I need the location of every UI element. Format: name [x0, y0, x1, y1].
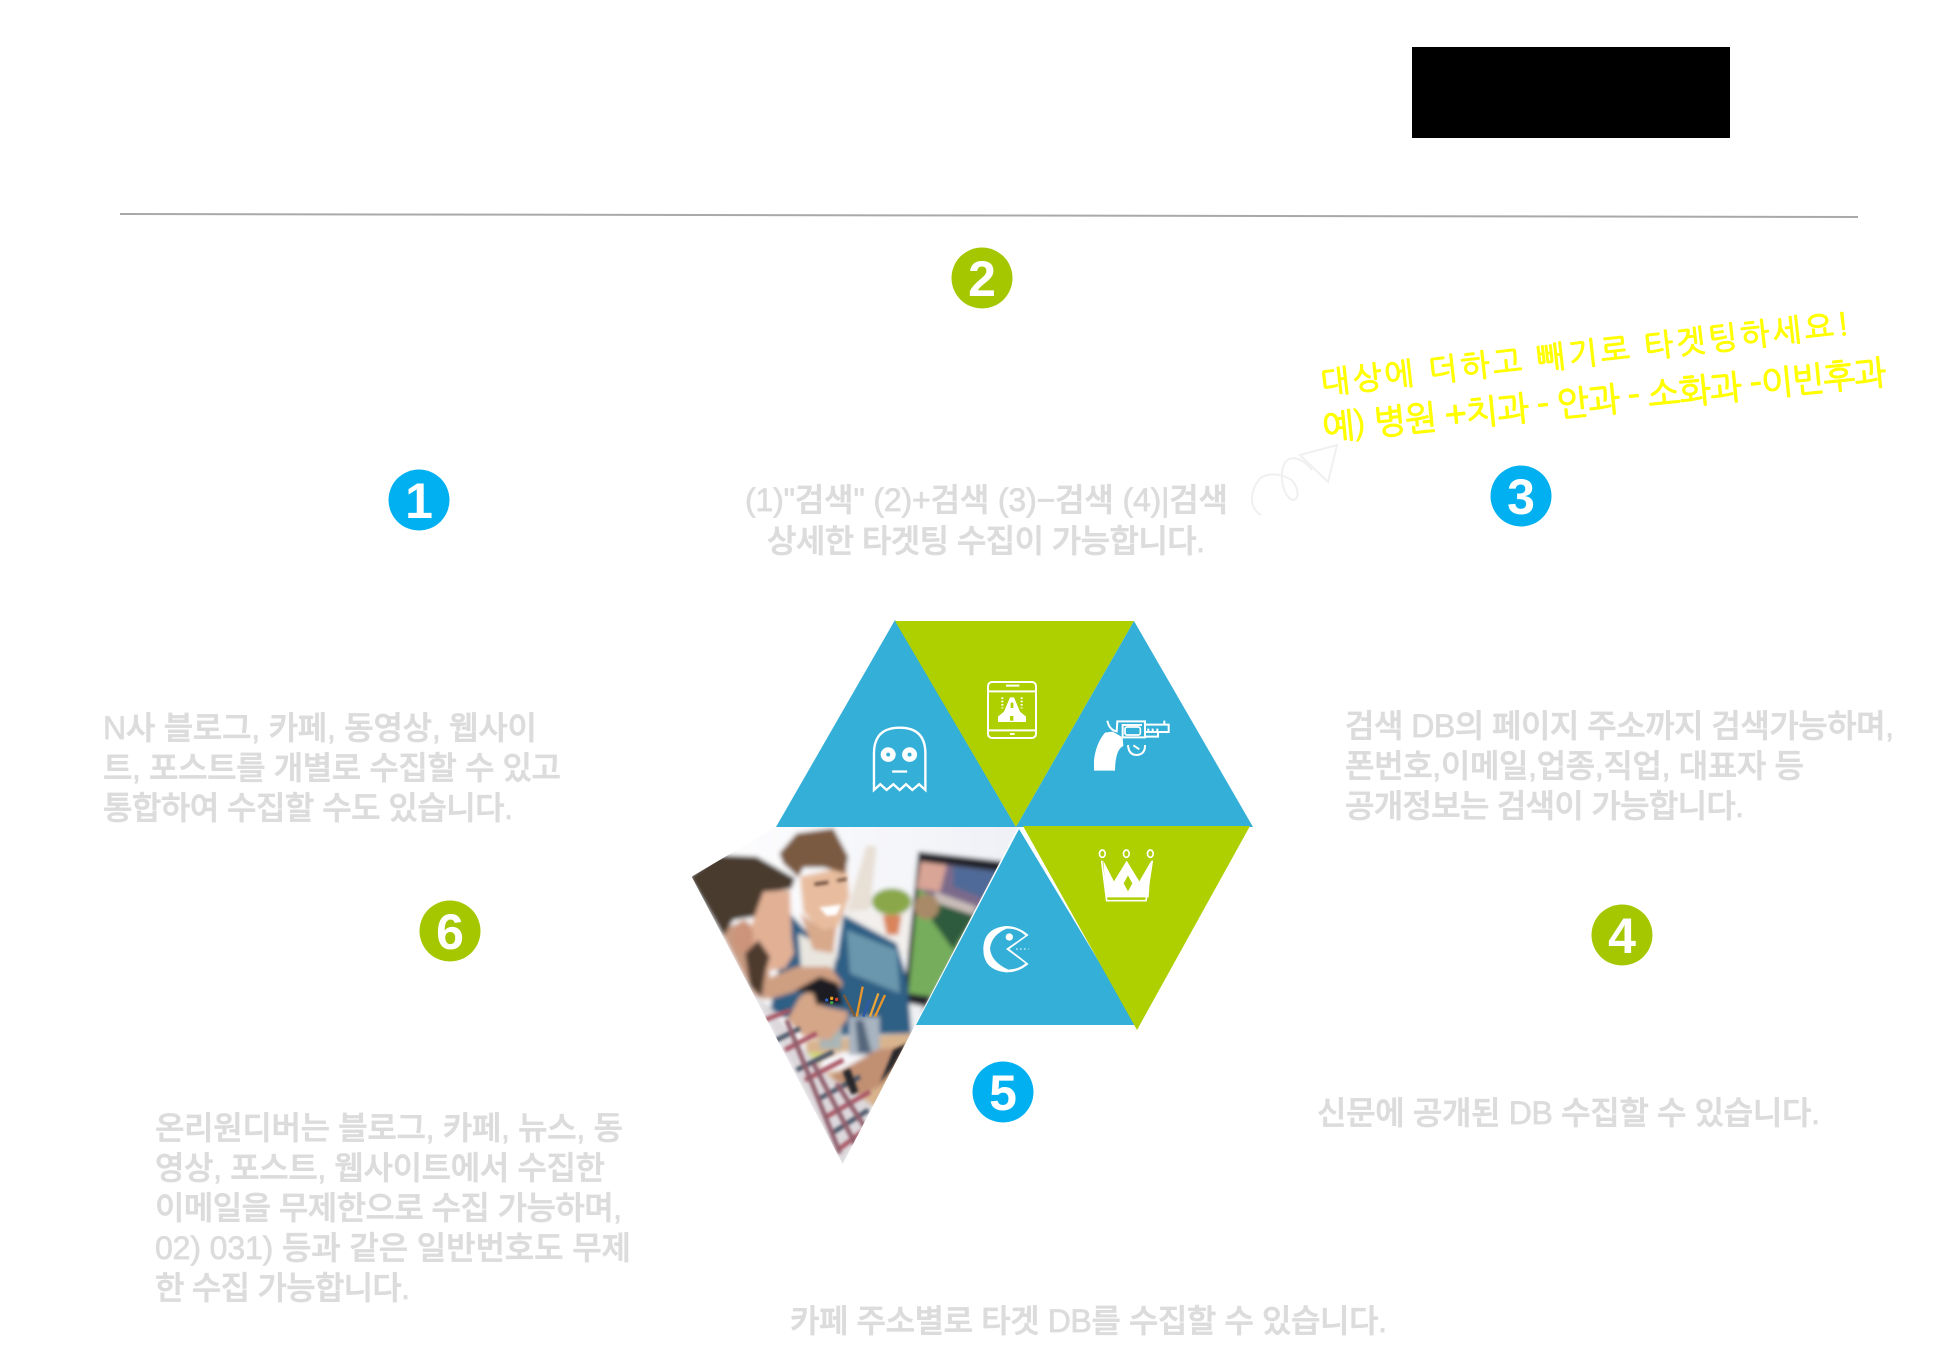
text: item 6: 02) 031) 등과 같은 일반번호도 무제: [155, 1230, 631, 1266]
icon: ghost: [874, 728, 925, 790]
badge 5: [972, 1062, 1034, 1122]
sub: watch and dark controller: [843, 1043, 907, 1095]
badge 4: [1592, 904, 1652, 966]
triangle: bottom-right green: [1023, 826, 1250, 1030]
text: item 3: 폰번호,이메일,업종,직업, 대표자 등: [1345, 748, 1804, 784]
badge 5: 5: [989, 1065, 1017, 1121]
icon: revolver: [1094, 721, 1169, 771]
sub: pencils: [844, 987, 885, 1017]
icon: tablet with spaceship: [988, 682, 1036, 738]
badge 6: [420, 900, 480, 962]
text: item 1: 트, 포스트를 개별로 수집할 수 있고: [103, 750, 561, 786]
badge 2: 2: [968, 251, 996, 307]
triangle: top-left blue: [776, 620, 1016, 827]
text: item 5: 카페 주소별로 타겟 DB를 수집할 수 있습니다.: [790, 1303, 1387, 1339]
triangle: bottom-center blue: [916, 829, 1137, 1025]
black redaction box: [1412, 47, 1730, 138]
handwritten note: 대상에 더하고 빼기로 타겟팅하세요!: [1319, 309, 1851, 399]
header divider line: [120, 214, 1858, 217]
text: item 6: 온리원디버는 블로그, 카페, 뉴스, 동: [155, 1110, 623, 1146]
text: item 6: 영상, 포스트, 웹사이트에서 수집한: [155, 1150, 605, 1186]
text: item 1: N사 블로그, 카페, 동영상, 웹사이: [103, 710, 537, 746]
text: item 1: [103, 710, 561, 826]
photo: two men gaming in triangle: [692, 827, 1018, 1164]
text: item 6: 이메일을 무제한으로 수집 가능하며,: [155, 1190, 622, 1226]
handwritten note: [1319, 309, 1888, 445]
icon: crown: [1099, 850, 1153, 901]
badge 3: 3: [1507, 469, 1535, 525]
badge 1: [388, 470, 450, 530]
text: item 3: 공개정보는 검색이 가능합니다.: [1345, 788, 1744, 824]
text: item 6: [155, 1110, 631, 1306]
badge 2: [952, 248, 1012, 308]
badge 1: 1: [405, 473, 433, 529]
text: search operators: [745, 482, 1228, 559]
text: item 3: 검색 DB의 페이지 주소까지 검색가능하며,: [1345, 708, 1894, 744]
triangle: top-center green: [895, 621, 1134, 827]
text: search operators: 상세한 타겟팅 수집이 가능합니다.: [767, 523, 1205, 559]
text: item 6: 한 수집 가능합니다.: [155, 1270, 410, 1306]
text: item 3: [1345, 708, 1894, 824]
badge 4: 4: [1608, 908, 1636, 964]
icon: pacman: [983, 926, 1029, 972]
text: search operators: (1)"검색" (2)+검색 (3)−검색 (4)|검색: [745, 482, 1228, 518]
sub: face details: [814, 877, 847, 916]
text: item 1: 통합하여 수집할 수도 있습니다.: [103, 790, 513, 826]
icon: paper plane doodle: [1252, 445, 1337, 515]
sub: controller buttons: [825, 997, 838, 1004]
text: item 4: 신문에 공개된 DB 수집할 수 있습니다.: [1317, 1095, 1820, 1131]
badge 6: 6: [436, 904, 464, 960]
badge 3: [1490, 466, 1552, 526]
handwritten note: 예) 병원 +치과 - 안과 - 소화과 -이빈후과: [1321, 355, 1888, 445]
triangle: top-right blue: [1016, 621, 1253, 827]
